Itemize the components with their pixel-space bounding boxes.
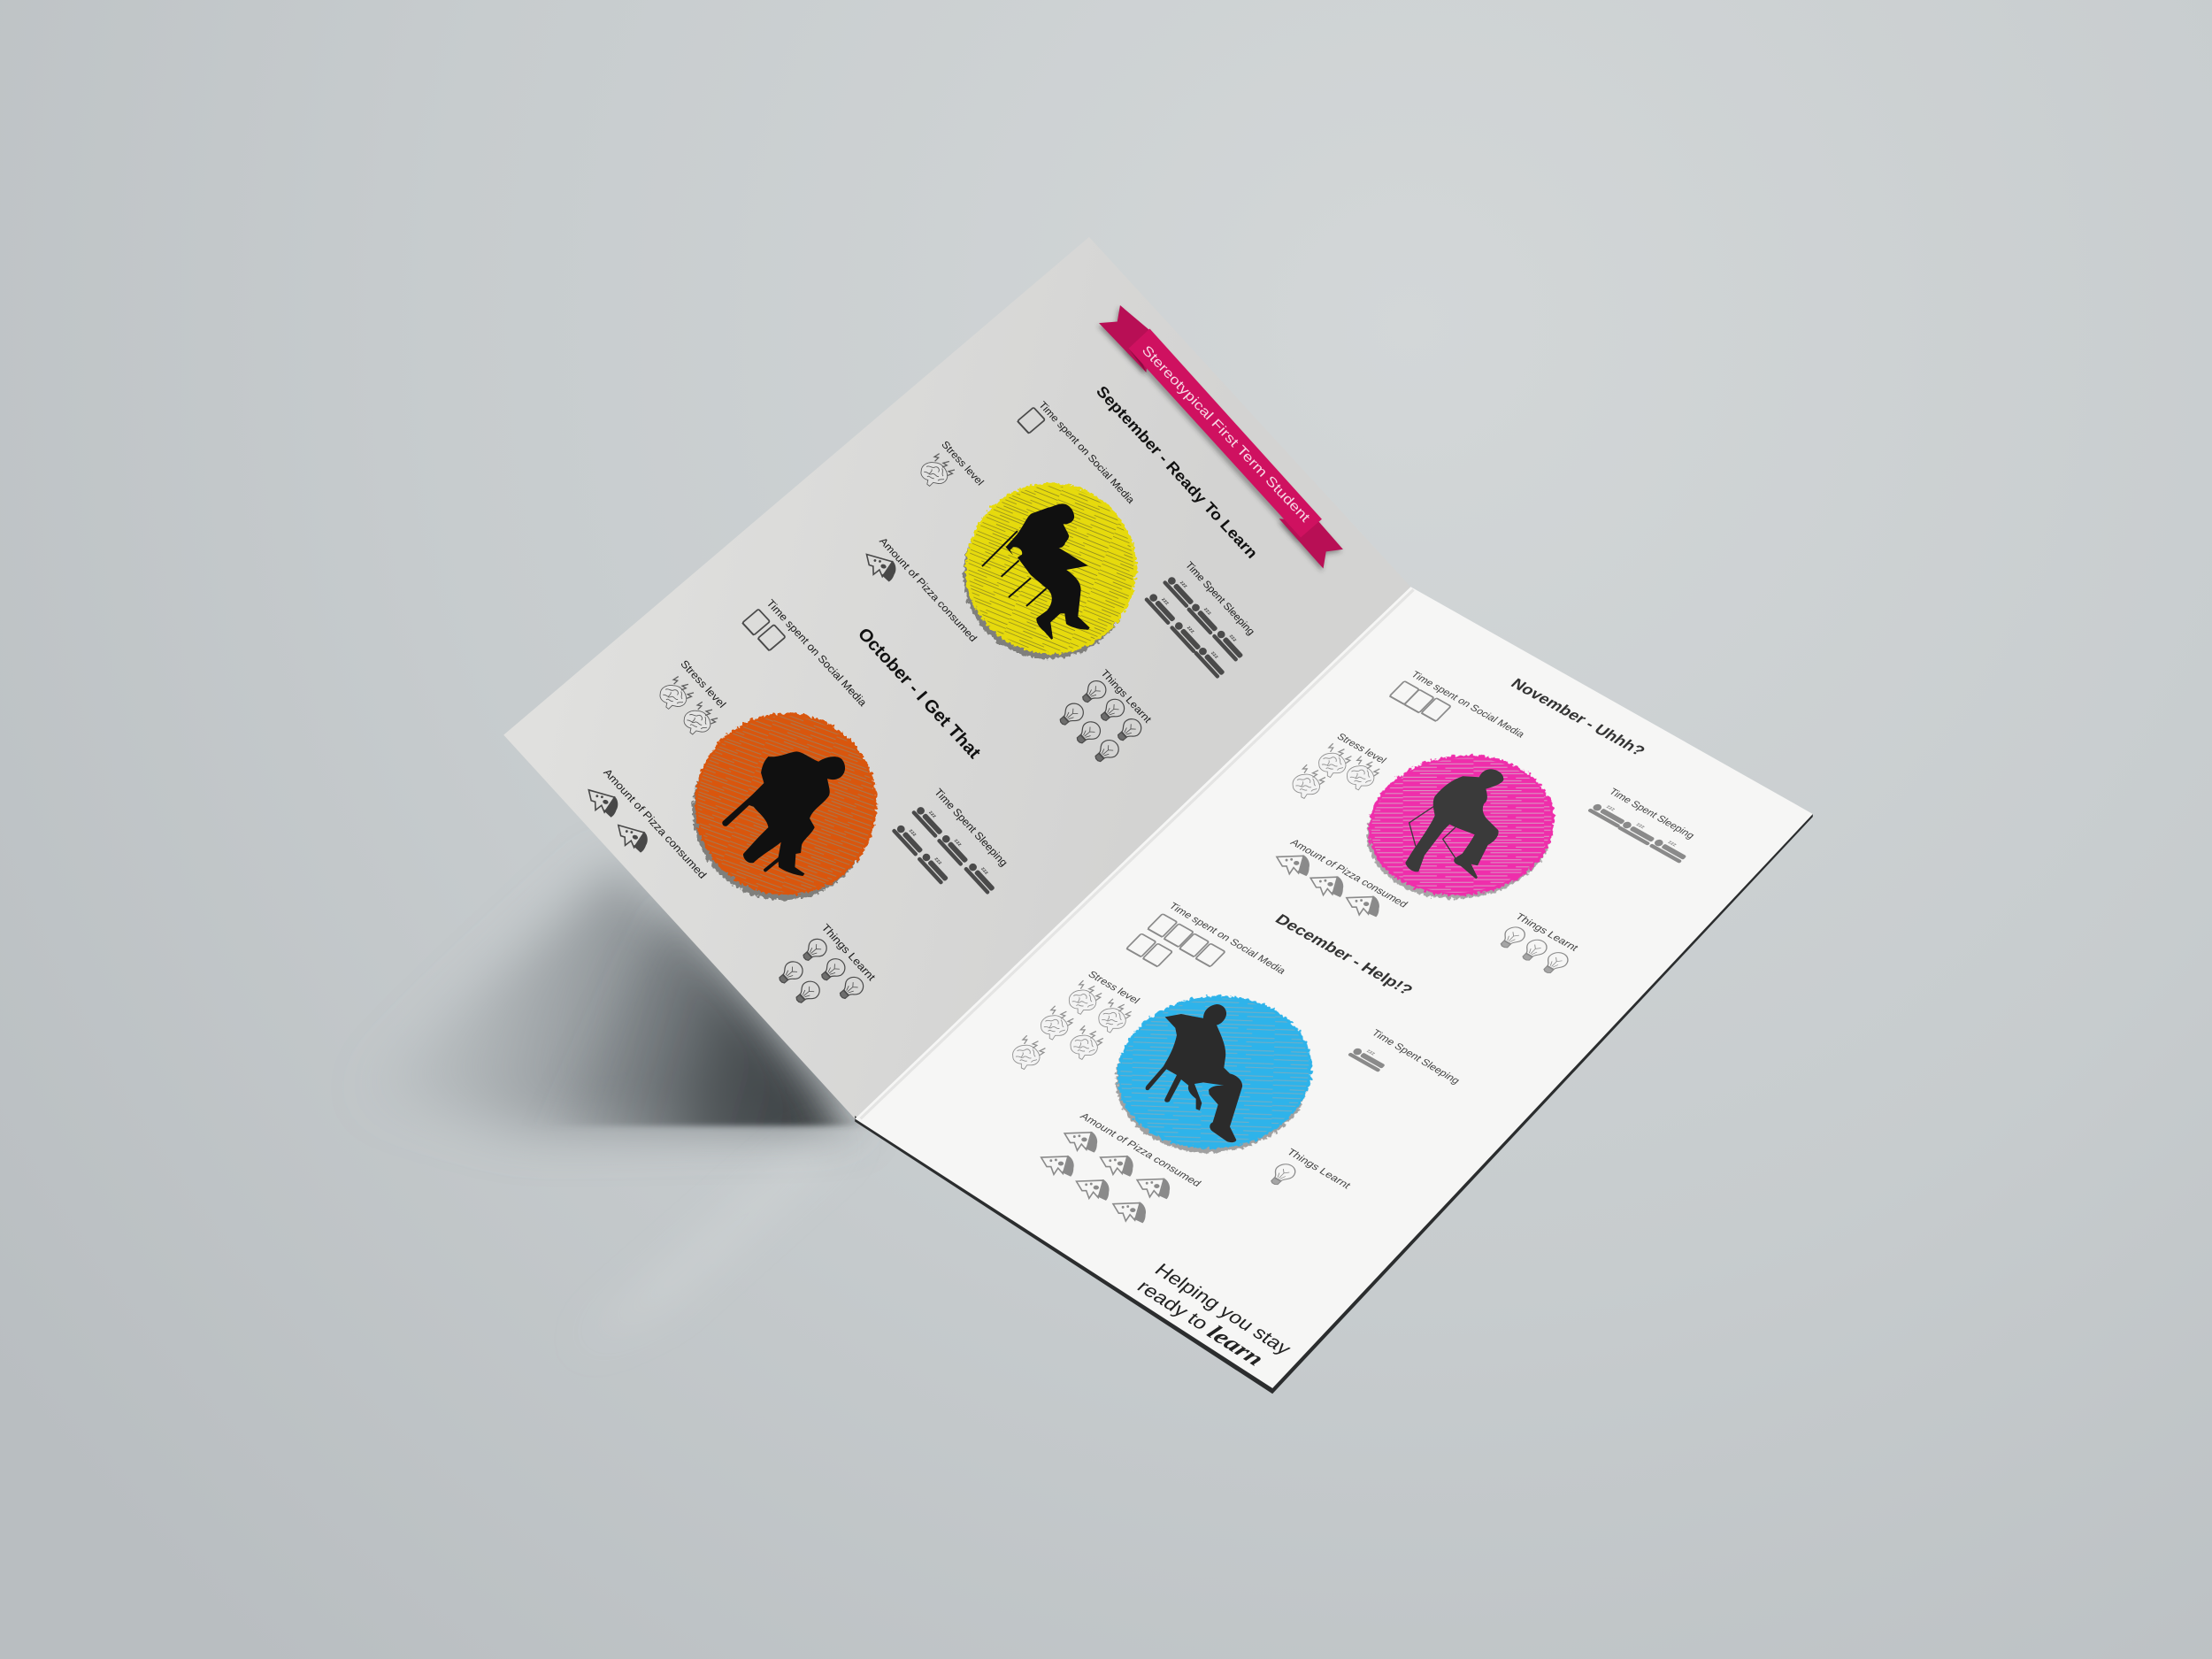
- label: sleep: Time Spent Sleeping: [1183, 560, 1256, 637]
- blue scribble circle with reclining figure: [1109, 987, 1319, 1163]
- footer tagline: ready to: [1133, 1277, 1213, 1333]
- label: things learnt: Things Learnt: [819, 922, 879, 984]
- label: things learnt: Things Learnt: [1098, 668, 1154, 726]
- icons: tablets: [1390, 681, 1451, 721]
- label: stress: Stress level: [1086, 970, 1141, 1006]
- icons: bulb: [1265, 1161, 1299, 1188]
- icons: bulbs: [1495, 924, 1572, 977]
- icons: beds: [1587, 799, 1691, 864]
- icons: brains: [918, 450, 957, 490]
- icons: bed: [1348, 1043, 1390, 1072]
- icons: tablets: [1126, 914, 1225, 967]
- ribbon: title banner: [1097, 305, 1343, 572]
- icons: beds: [891, 802, 1000, 895]
- dark contact shadow at the fold: [569, 911, 862, 1131]
- heading: October: October - I Get That: [854, 625, 985, 763]
- icons: beds: [1144, 572, 1248, 679]
- soft cast shadow under the raised page: [360, 864, 855, 1129]
- label: sleep: Time Spent Sleeping: [932, 786, 1010, 869]
- ribbon: title banner: Stereotypical First Term Student: [1139, 342, 1313, 526]
- icons: tablets: [1018, 407, 1045, 434]
- icons: pizza: [861, 552, 898, 583]
- icons: tablets: [742, 609, 786, 650]
- icons: bulbs: [774, 935, 867, 1008]
- pink scribble circle with seated figure: [1360, 746, 1562, 908]
- label: stress: Stress level: [678, 657, 728, 710]
- floor reflection: [579, 1132, 855, 1348]
- section: December: [1013, 902, 1462, 1223]
- label: pizza: Amount of Pizza consumed: [601, 766, 709, 881]
- label: social media: Time spent on Social Media: [764, 597, 870, 709]
- icons: pizza: [1277, 855, 1379, 917]
- heading: September: September - Ready To Learn: [1093, 382, 1262, 562]
- label: things learnt: Things Learnt: [1285, 1148, 1353, 1191]
- footer tagline: [1133, 1260, 1295, 1371]
- icons: brains: [1013, 980, 1132, 1070]
- label: stress: Stress level: [939, 440, 986, 488]
- orange scribble circle with slumped figure: [693, 713, 877, 900]
- icons: bulbs: [1056, 677, 1145, 766]
- label: things learnt: Things Learnt: [1513, 912, 1580, 954]
- section: September: [861, 382, 1262, 766]
- label: pizza: Amount of Pizza consumed: [1078, 1111, 1202, 1189]
- footer tagline: Helping you stay: [1150, 1260, 1295, 1359]
- label: social media: Time spent on Social Media: [1409, 670, 1527, 740]
- icons: brains: [1293, 743, 1379, 798]
- label: social media: Time spent on Social Media: [1036, 400, 1136, 506]
- heading: December: December - Help!?: [1271, 910, 1417, 998]
- label: sleep: Time Spent Sleeping: [1369, 1028, 1462, 1087]
- footer tagline: learn: [1202, 1320, 1270, 1371]
- label: stress: Stress level: [1334, 732, 1388, 765]
- label: pizza: Amount of Pizza consumed: [1287, 838, 1409, 910]
- yellow scribble circle with seated figure: [964, 483, 1136, 659]
- panel: left page: [503, 237, 1410, 1118]
- section: November: [1277, 670, 1696, 977]
- panel: right page: [855, 587, 1813, 1394]
- section: October: [583, 597, 1010, 1008]
- label: sleep: Time Spent Sleeping: [1607, 787, 1696, 841]
- label: pizza: Amount of Pizza consumed: [877, 536, 979, 644]
- label: social media: Time spent on Social Media: [1166, 902, 1288, 977]
- icons: brains: [657, 673, 720, 739]
- icons: pizza: [1041, 1132, 1170, 1223]
- heading: November: November - Uhhh?: [1508, 675, 1649, 759]
- icons: pizza: [583, 788, 650, 854]
